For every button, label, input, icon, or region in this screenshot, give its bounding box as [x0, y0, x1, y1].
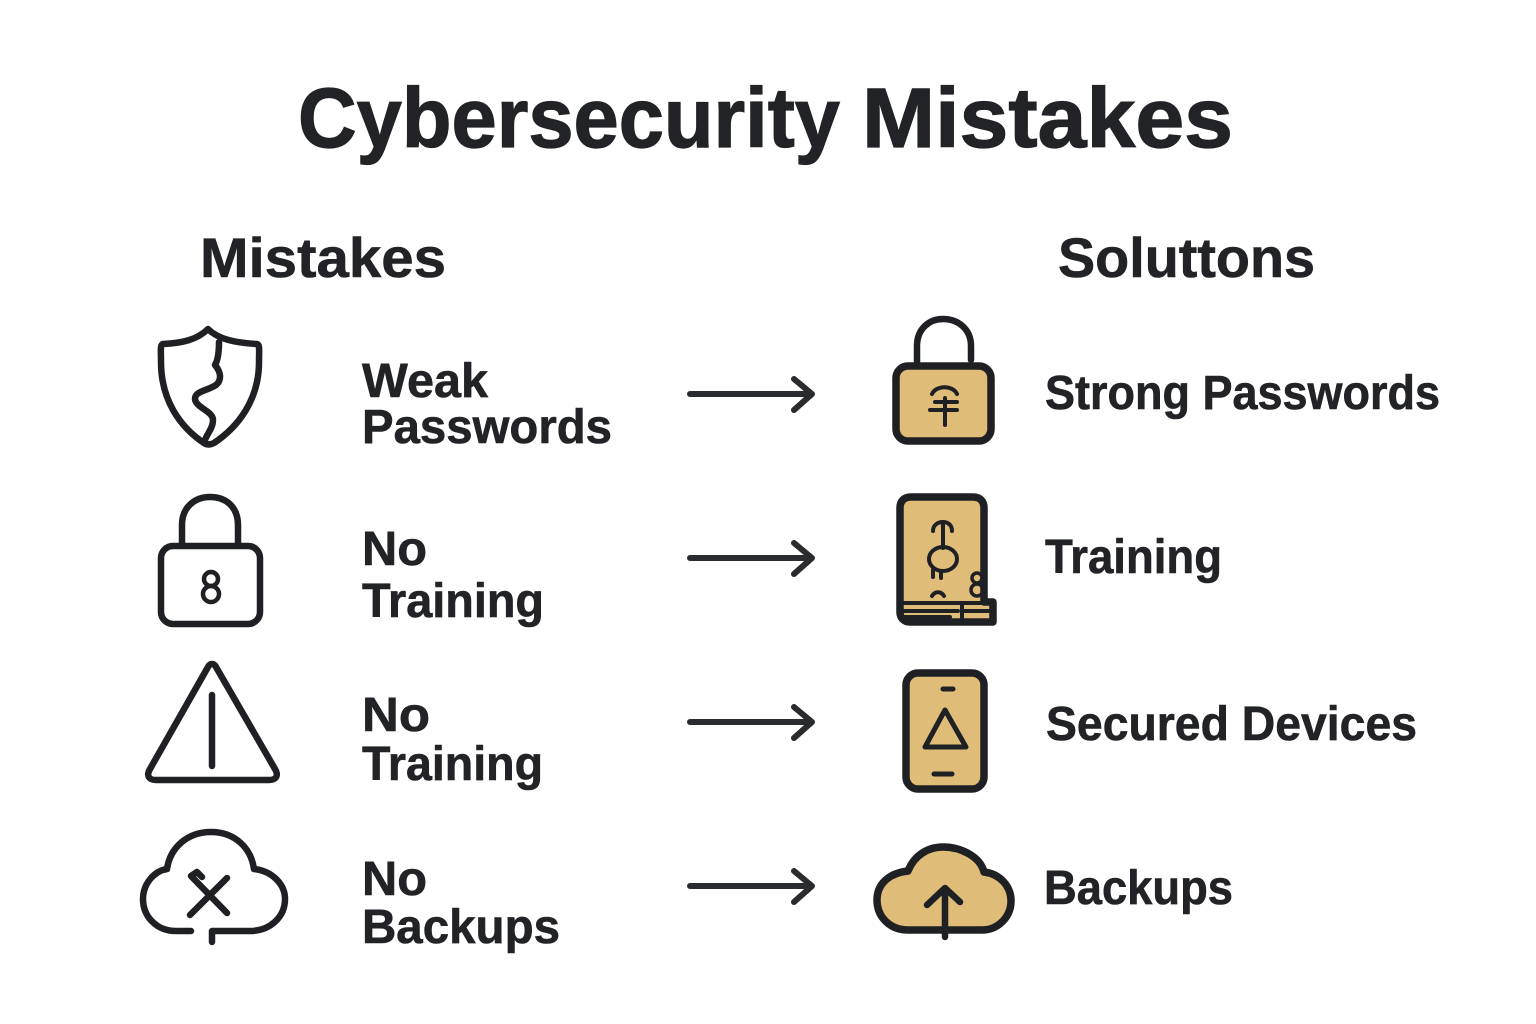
text: no training: No — [362, 689, 430, 742]
title — [298, 71, 1233, 165]
arrow — [690, 379, 812, 410]
text: training: Training — [1045, 531, 1222, 584]
text: no training: No — [362, 523, 427, 576]
row 4: no backups to backups — [143, 832, 1233, 954]
icon: gold cloud with up arrow — [877, 847, 1011, 937]
text: weak passwords: Weak — [362, 355, 488, 408]
icon: gold phone with triangle — [906, 673, 984, 789]
text: no backups: Backups — [362, 901, 560, 954]
arrow — [690, 871, 812, 902]
text: no backups: No — [362, 853, 427, 906]
text: no training — [362, 523, 544, 628]
icon: cloud with x — [143, 832, 285, 942]
text: weak passwords — [362, 355, 612, 454]
title: Mistakes — [862, 71, 1233, 165]
icon: cracked shield — [161, 329, 259, 444]
row 3: no training to secured devices — [148, 664, 1417, 791]
arrow — [690, 707, 812, 738]
icon: gold padlock — [896, 319, 991, 441]
text: no training: Training — [362, 575, 544, 628]
icon: warning triangle — [148, 664, 277, 780]
icon: gold book with key — [900, 497, 993, 622]
heading: mistakes column: Mistakes — [200, 226, 446, 289]
heading: solutions column: Soluttons — [1058, 226, 1315, 289]
text: backups: Backups — [1044, 862, 1233, 915]
icon: padlock with 8 — [161, 497, 260, 624]
text: secured devices: Secured Devices — [1046, 698, 1417, 751]
text: no training: Training — [362, 738, 543, 791]
text: weak passwords: Passwords — [362, 401, 612, 454]
row 1: weak passwords to strong passwords — [161, 319, 1440, 454]
arrow — [690, 543, 812, 574]
title: Cybersecurity — [298, 71, 840, 165]
text: strong passwords: Strong Passwords — [1045, 367, 1440, 420]
text: no backups — [362, 853, 560, 954]
text: no training — [362, 689, 543, 791]
row 2: no training to training — [161, 497, 1222, 628]
